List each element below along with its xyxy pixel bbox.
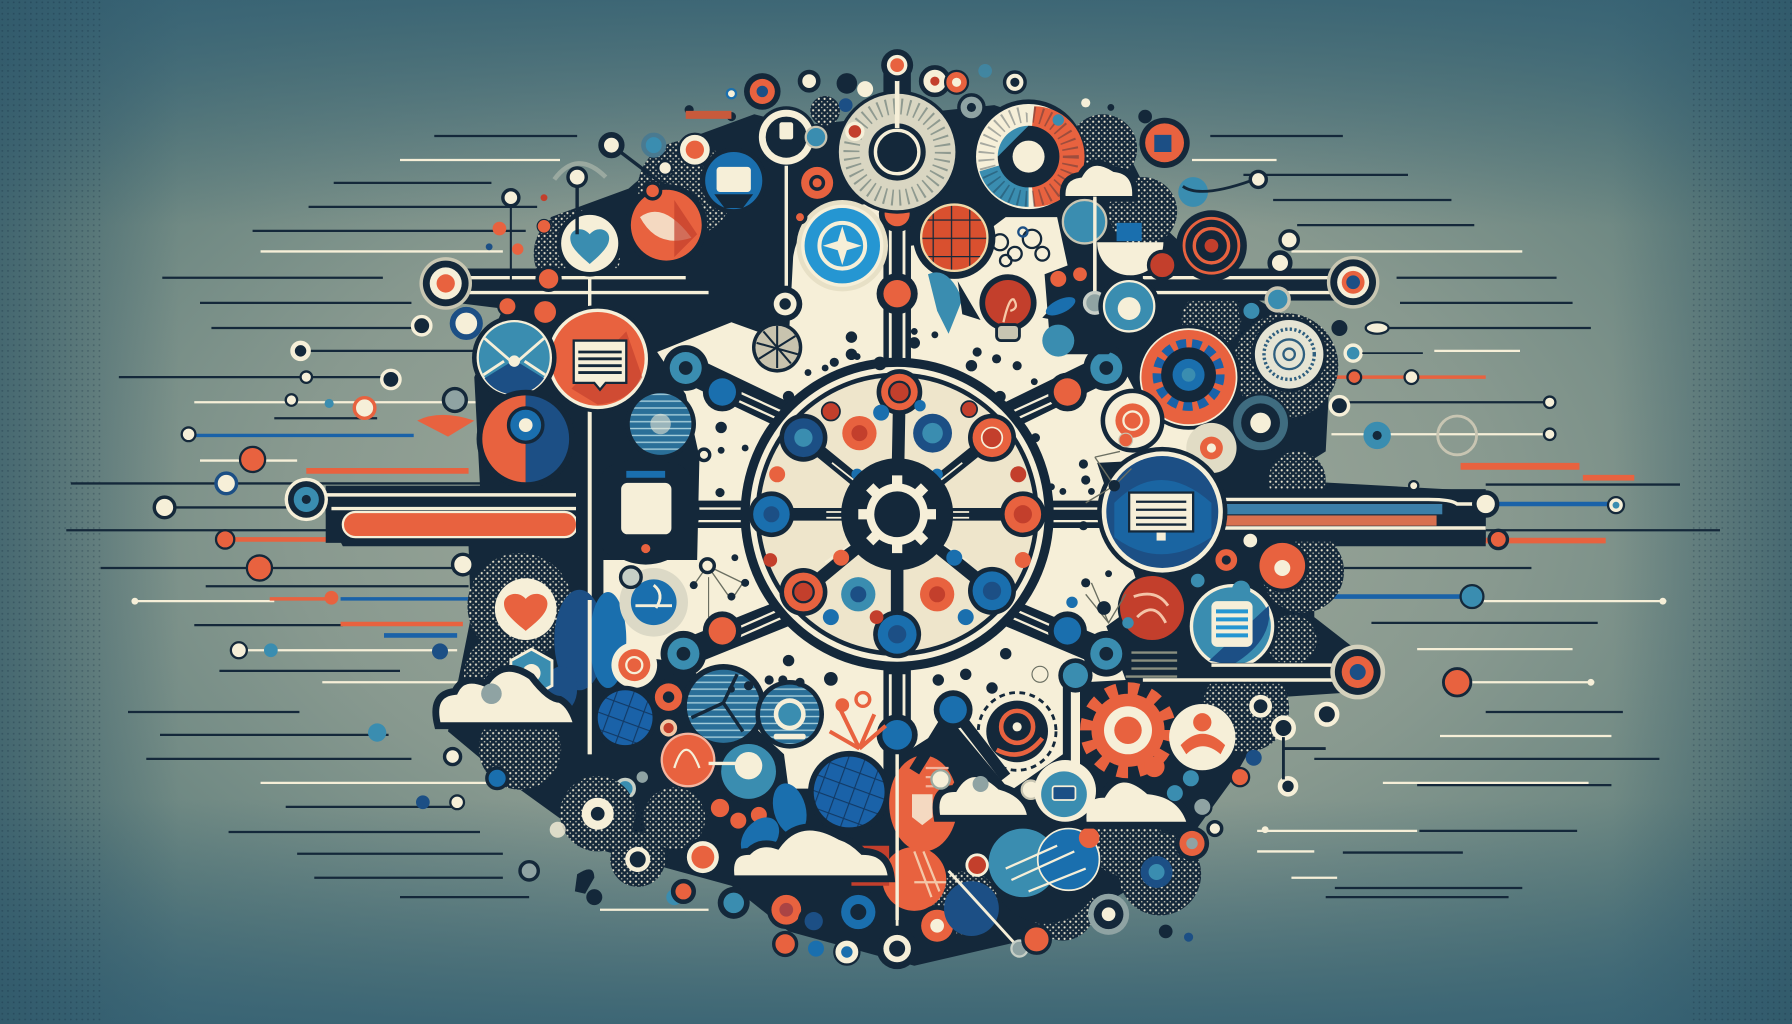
cloud lower right xyxy=(1083,779,1191,825)
left bus with orange tube xyxy=(216,478,589,549)
icon: cream rose small xyxy=(1186,423,1237,473)
panel: upper right cluster icons xyxy=(752,118,1327,473)
dial stem xyxy=(895,78,899,128)
monitor xyxy=(1129,493,1193,531)
icon: blue half disc xyxy=(1063,197,1106,297)
icon: orange dots pair xyxy=(1050,267,1087,287)
panel: left edge nodes xyxy=(131,297,694,905)
icon: textured globe xyxy=(625,389,696,459)
connector end node xyxy=(1327,256,1379,309)
icon: cream disc xyxy=(621,567,641,587)
icon: blue leaves behind mast xyxy=(545,590,626,754)
node lower left pair xyxy=(661,611,742,677)
connector rails xyxy=(463,272,709,343)
vertical mast left xyxy=(576,406,603,771)
icon: orange heart xyxy=(495,578,557,640)
icon: right connector xyxy=(1143,645,1385,699)
hub small discs xyxy=(763,400,1031,625)
band blue xyxy=(1225,504,1442,514)
icon: blue globe xyxy=(593,686,657,750)
hub centre disc xyxy=(841,458,953,570)
orange tube xyxy=(343,512,577,537)
mini network right bottom xyxy=(1066,570,1134,638)
icon: bottom ring nodes xyxy=(718,887,881,965)
mini network left lower xyxy=(709,577,1048,682)
horizontal spokes xyxy=(674,502,1131,526)
icon: small ring xyxy=(662,721,675,735)
icon: bottom spine node xyxy=(877,928,918,969)
icon: dark blue wheel xyxy=(1231,393,1290,453)
hub face xyxy=(760,377,1034,651)
icon: orange cream disc xyxy=(917,905,958,946)
icon: red small xyxy=(1149,251,1176,279)
cream central field xyxy=(597,203,1214,791)
icon: blue envelope xyxy=(472,315,557,400)
icon: orange gear xyxy=(1087,689,1169,771)
diagonal spokes xyxy=(683,368,1106,654)
icon: swoosh eye xyxy=(554,163,606,234)
hub node top xyxy=(877,369,922,415)
lower right bus node xyxy=(1489,530,1507,549)
left horizontal data lines xyxy=(66,136,709,910)
icon: tangled globe xyxy=(989,814,1101,923)
icon: stippled ball xyxy=(643,787,705,849)
dial ticks xyxy=(851,106,943,198)
icon: blue badge xyxy=(1034,760,1096,822)
monitor lines xyxy=(1136,502,1186,525)
icon: hexagon badge xyxy=(511,649,552,697)
monitor stand xyxy=(1157,533,1166,541)
icon: connector ring node xyxy=(601,135,672,199)
icon: blue tip connector xyxy=(1178,171,1266,207)
outer spoke nodes xyxy=(661,195,1129,755)
icon: orange blue split disc xyxy=(477,390,575,488)
icon: orange shield disc behind mast xyxy=(889,755,958,851)
icon: light bulb xyxy=(979,274,1037,341)
connector end node xyxy=(419,257,472,310)
icon: orange red ring xyxy=(798,163,837,202)
icon: small orange ring xyxy=(794,211,806,223)
icon: blue node with stem xyxy=(914,690,1006,777)
icon: storage half moon xyxy=(1097,223,1163,275)
connector rails xyxy=(1143,278,1331,293)
hub node lower right xyxy=(968,567,1016,615)
rails xyxy=(1221,499,1486,528)
icon: blue leaves xyxy=(733,780,812,866)
central hub xyxy=(741,358,1054,671)
cloud upper right xyxy=(1063,163,1135,297)
cloud centre xyxy=(731,827,891,879)
icon: stippled gear ball xyxy=(560,776,635,851)
chat bubble xyxy=(574,341,626,390)
icon: blue capsule xyxy=(1043,293,1078,319)
icon: hub gear xyxy=(858,475,936,553)
icon: concentric orange xyxy=(1176,210,1247,281)
icon: teal heart xyxy=(557,210,623,277)
icon: file ring xyxy=(755,106,817,168)
icon: orange ring xyxy=(650,679,687,715)
cream rails xyxy=(326,495,583,509)
icon: cream orange disc xyxy=(679,134,711,166)
spine top rails xyxy=(890,217,904,366)
dark network mass xyxy=(326,105,1486,966)
icon: connector disc xyxy=(709,738,782,805)
icon: sketch ball xyxy=(752,322,802,373)
hub node upper right xyxy=(968,414,1016,462)
icon: orange chat xyxy=(544,305,651,413)
left end node xyxy=(216,530,234,549)
icon: red globe xyxy=(913,197,995,279)
pie segment teal xyxy=(998,126,1029,157)
diagonal rails xyxy=(731,389,1063,640)
panel: bottom cluster icons xyxy=(718,754,1209,969)
icon: small rings xyxy=(1241,231,1298,321)
hub node upper left xyxy=(779,414,827,462)
icon: mast line to compass xyxy=(785,166,788,286)
panel: top scatter xyxy=(486,64,1152,290)
icon: orange swirl xyxy=(611,642,657,688)
icon: orange gate xyxy=(661,733,715,787)
icon: scatter dots left top xyxy=(486,89,736,290)
icon: document disc xyxy=(1186,581,1278,672)
spine bottom xyxy=(883,669,911,954)
icon: orange leaf xyxy=(625,184,707,266)
icon: orange gear panel xyxy=(1136,325,1241,430)
long right connector xyxy=(1143,256,1379,309)
dots upper centre xyxy=(783,328,1038,402)
icon: small ring pair xyxy=(1191,533,1258,599)
spokes and spine xyxy=(674,69,1131,954)
hub outer ring xyxy=(741,358,1054,671)
icon: tablet xyxy=(592,457,699,565)
pie segment orange xyxy=(1029,106,1085,207)
dots centre left xyxy=(698,422,749,497)
band orange xyxy=(1225,515,1437,526)
icon: striped blue disc with arrow xyxy=(944,871,1027,957)
pie hole xyxy=(998,126,1059,187)
node upper left pair xyxy=(663,345,742,411)
icon: orange stripe disc xyxy=(882,847,946,911)
cloud lower right small xyxy=(936,774,1031,818)
pie ticks xyxy=(986,114,1071,199)
hub node right xyxy=(1000,491,1046,537)
icon: right cluster dots xyxy=(1159,826,1269,942)
icon: book monitor disc xyxy=(1097,447,1227,577)
dots centre right xyxy=(1031,433,1095,495)
icon: gray ring xyxy=(1088,894,1129,935)
right bus node xyxy=(1474,493,1497,515)
right horizontal data lines xyxy=(1192,136,1720,897)
panel: cream field scatter dots xyxy=(690,328,1134,694)
pie segment blue xyxy=(979,157,1029,207)
dial top node xyxy=(881,49,913,81)
panel: clouds xyxy=(436,163,1191,879)
right bus with bands xyxy=(1211,489,1507,549)
icon: hub knot xyxy=(768,287,802,321)
icon: orange ring top xyxy=(744,73,781,110)
left bus node xyxy=(285,478,328,521)
icon: orange dots xyxy=(711,799,767,829)
icon: red crescent behind mast xyxy=(851,846,889,886)
lower dots xyxy=(728,648,1011,694)
icon: right side ring nodes xyxy=(1231,697,1337,794)
icon: coral sprig xyxy=(830,693,886,749)
pie dial xyxy=(971,99,1086,214)
hub node bottom xyxy=(873,610,921,658)
icon: webcam xyxy=(755,680,824,749)
icon: small teal discs xyxy=(616,771,673,814)
hub node lower left xyxy=(779,568,827,616)
node upper right pair xyxy=(1048,345,1129,411)
long left connector xyxy=(419,257,709,343)
icon: orange disc with red center xyxy=(683,838,722,877)
chat bubble lines xyxy=(578,352,622,373)
stippled blobs xyxy=(464,114,1344,941)
icon: teal ring xyxy=(643,135,664,155)
icon: compass blue xyxy=(797,200,888,291)
hub spokes xyxy=(771,392,1023,634)
icon: orange box disc xyxy=(1139,118,1190,168)
icon: pin tail xyxy=(958,281,981,320)
icon: dark arm xyxy=(1045,263,1131,354)
icon: small discs right lower xyxy=(931,757,1222,835)
icon: blue shield disc xyxy=(1098,275,1160,337)
icon: blue loop disc xyxy=(619,568,688,637)
icon: network globe xyxy=(808,751,890,833)
icon: target dark ring xyxy=(978,693,1056,770)
hub node left xyxy=(749,491,794,537)
top dial xyxy=(835,49,959,214)
icon: hexagon centre xyxy=(522,664,541,682)
icon: blue storage xyxy=(701,147,767,214)
icon: right upper edge nodes xyxy=(1330,321,1666,696)
mini network left xyxy=(690,554,749,601)
icon: orange dot near cloud xyxy=(1079,827,1099,848)
node lower right pair xyxy=(1048,611,1129,677)
cloud left xyxy=(436,668,577,726)
icon: spiral disc xyxy=(1251,317,1327,392)
icon: blue node mast xyxy=(1058,658,1093,766)
gear teeth xyxy=(1158,344,1219,406)
icon: orange hand xyxy=(1256,539,1309,592)
icon: orange ring right xyxy=(1175,826,1209,861)
icon: rings xyxy=(1042,293,1105,357)
icon: spiral blue xyxy=(1141,856,1173,888)
icon: small rings top xyxy=(800,72,873,147)
icon: doodle cluster xyxy=(992,227,1049,266)
hub rails xyxy=(825,463,969,562)
icon: orange small disc xyxy=(1023,926,1050,953)
icon: top right scatter xyxy=(921,64,1152,126)
spine nodes xyxy=(877,195,918,755)
icon: cream orange rose xyxy=(1101,389,1165,453)
horizontal rails xyxy=(691,509,1109,521)
icon: teal pin xyxy=(928,272,962,334)
mini network right top xyxy=(1079,433,1133,530)
spine bottom rails xyxy=(890,674,904,926)
panel: right cluster icons xyxy=(914,321,1666,942)
icon: textured teal disc xyxy=(681,664,766,749)
panel: left cluster icons xyxy=(472,106,890,887)
icon: red dot disc xyxy=(967,855,987,875)
icon: lower mast rail xyxy=(896,754,899,920)
icon: orange fish disc xyxy=(1118,574,1186,642)
icon: stippled small ball xyxy=(610,832,665,887)
icon: person disc xyxy=(1169,704,1235,770)
spine top xyxy=(883,69,911,389)
icon: stripes xyxy=(1126,653,1177,677)
